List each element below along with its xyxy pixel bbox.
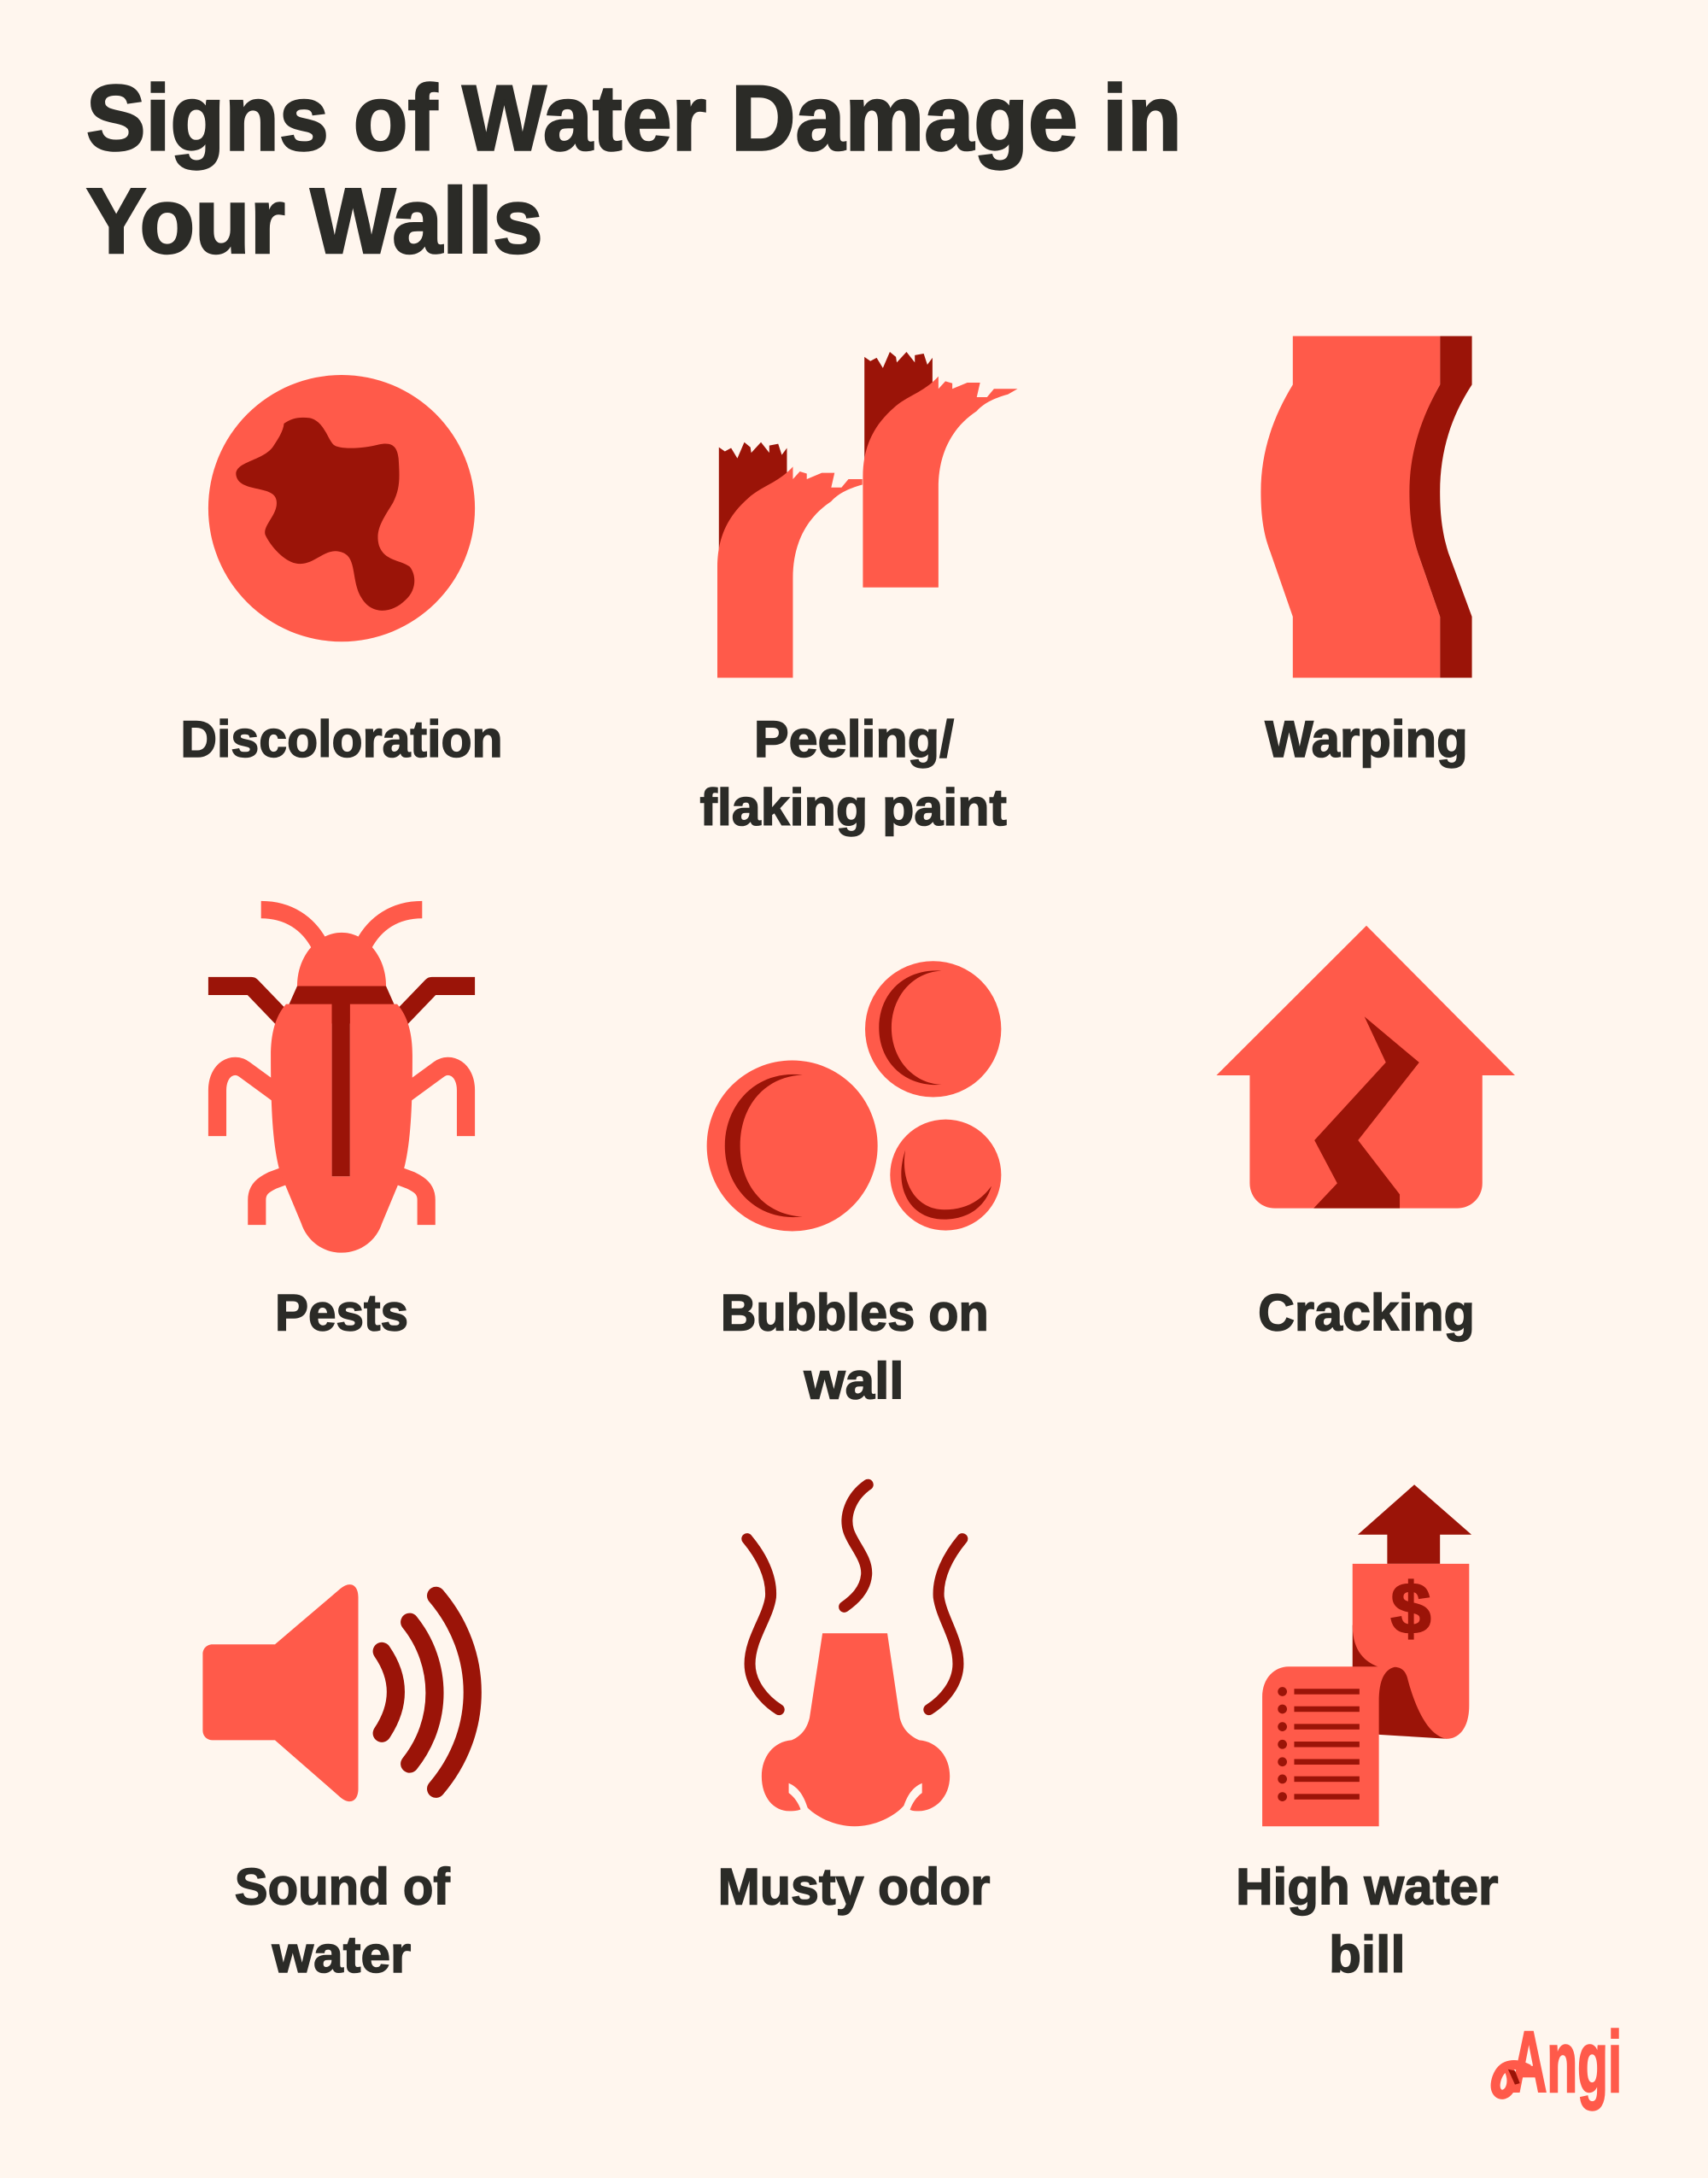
- logo: Angi: [1495, 2015, 1622, 2111]
- icon: back strip of peeling paint: [863, 352, 1018, 588]
- icon: upper bubble: [865, 961, 1001, 1098]
- panel: peeling paint: [700, 352, 1018, 836]
- label: high water bill: [1236, 1858, 1498, 1983]
- label: sound of water: [235, 1858, 451, 1983]
- panel: discoloration: [180, 375, 503, 768]
- label: peeling paint: Peeling/: [754, 711, 954, 768]
- icon: large bubble: [707, 1060, 878, 1231]
- logo: Angi: Angi: [1511, 2015, 1622, 2111]
- icon: stained circle: [208, 375, 475, 641]
- label: bubbles on wall: [721, 1285, 989, 1409]
- label: peeling paint: [700, 711, 1007, 836]
- label: high water bill: High water: [1236, 1858, 1498, 1915]
- icon: rolled bill top: [1353, 1564, 1469, 1739]
- label: musty odor: Musty odor: [718, 1858, 990, 1915]
- panel: warping: [1261, 336, 1472, 768]
- icon: front strip of peeling paint: [717, 442, 863, 677]
- label: sound of water: Sound of: [235, 1858, 451, 1915]
- icon: warped wall: [1261, 336, 1472, 677]
- dollar sign: $: [1391, 1567, 1431, 1648]
- panel: sound of water: [202, 1584, 472, 1983]
- icon: cracked house: [1216, 926, 1515, 1209]
- panel: pests: [208, 910, 475, 1342]
- label: discoloration: Discoloration: [180, 711, 503, 768]
- panel: high water bill: [1236, 1484, 1498, 1983]
- label: sound of water: water: [272, 1926, 411, 1983]
- icon: cockroach: [208, 910, 475, 1253]
- label: pests: Pests: [275, 1285, 408, 1342]
- title: [86, 67, 1182, 273]
- label: bubbles on wall: wall: [803, 1352, 904, 1409]
- icon: up arrow: [1358, 1484, 1471, 1564]
- label: warping: Warping: [1265, 711, 1468, 768]
- icon: lower bubble: [890, 1120, 1001, 1231]
- label: bubbles on wall: Bubbles on: [721, 1285, 989, 1342]
- title: Signs of Water Damage in: [86, 67, 1182, 171]
- panel: musty odor: [718, 1484, 990, 1915]
- panel: cracking: [1216, 926, 1515, 1342]
- title: Your Walls: [86, 169, 543, 273]
- label: peeling paint: flaking paint: [700, 779, 1007, 836]
- label: cracking: Cracking: [1258, 1285, 1475, 1342]
- icon: bill sheet with lines: [1262, 1666, 1397, 1826]
- label: high water bill: bill: [1329, 1926, 1406, 1983]
- icon: nose with odor lines: [747, 1484, 962, 1826]
- icon: speaker: [202, 1584, 472, 1801]
- panel: bubbles on wall: [707, 961, 1001, 1409]
